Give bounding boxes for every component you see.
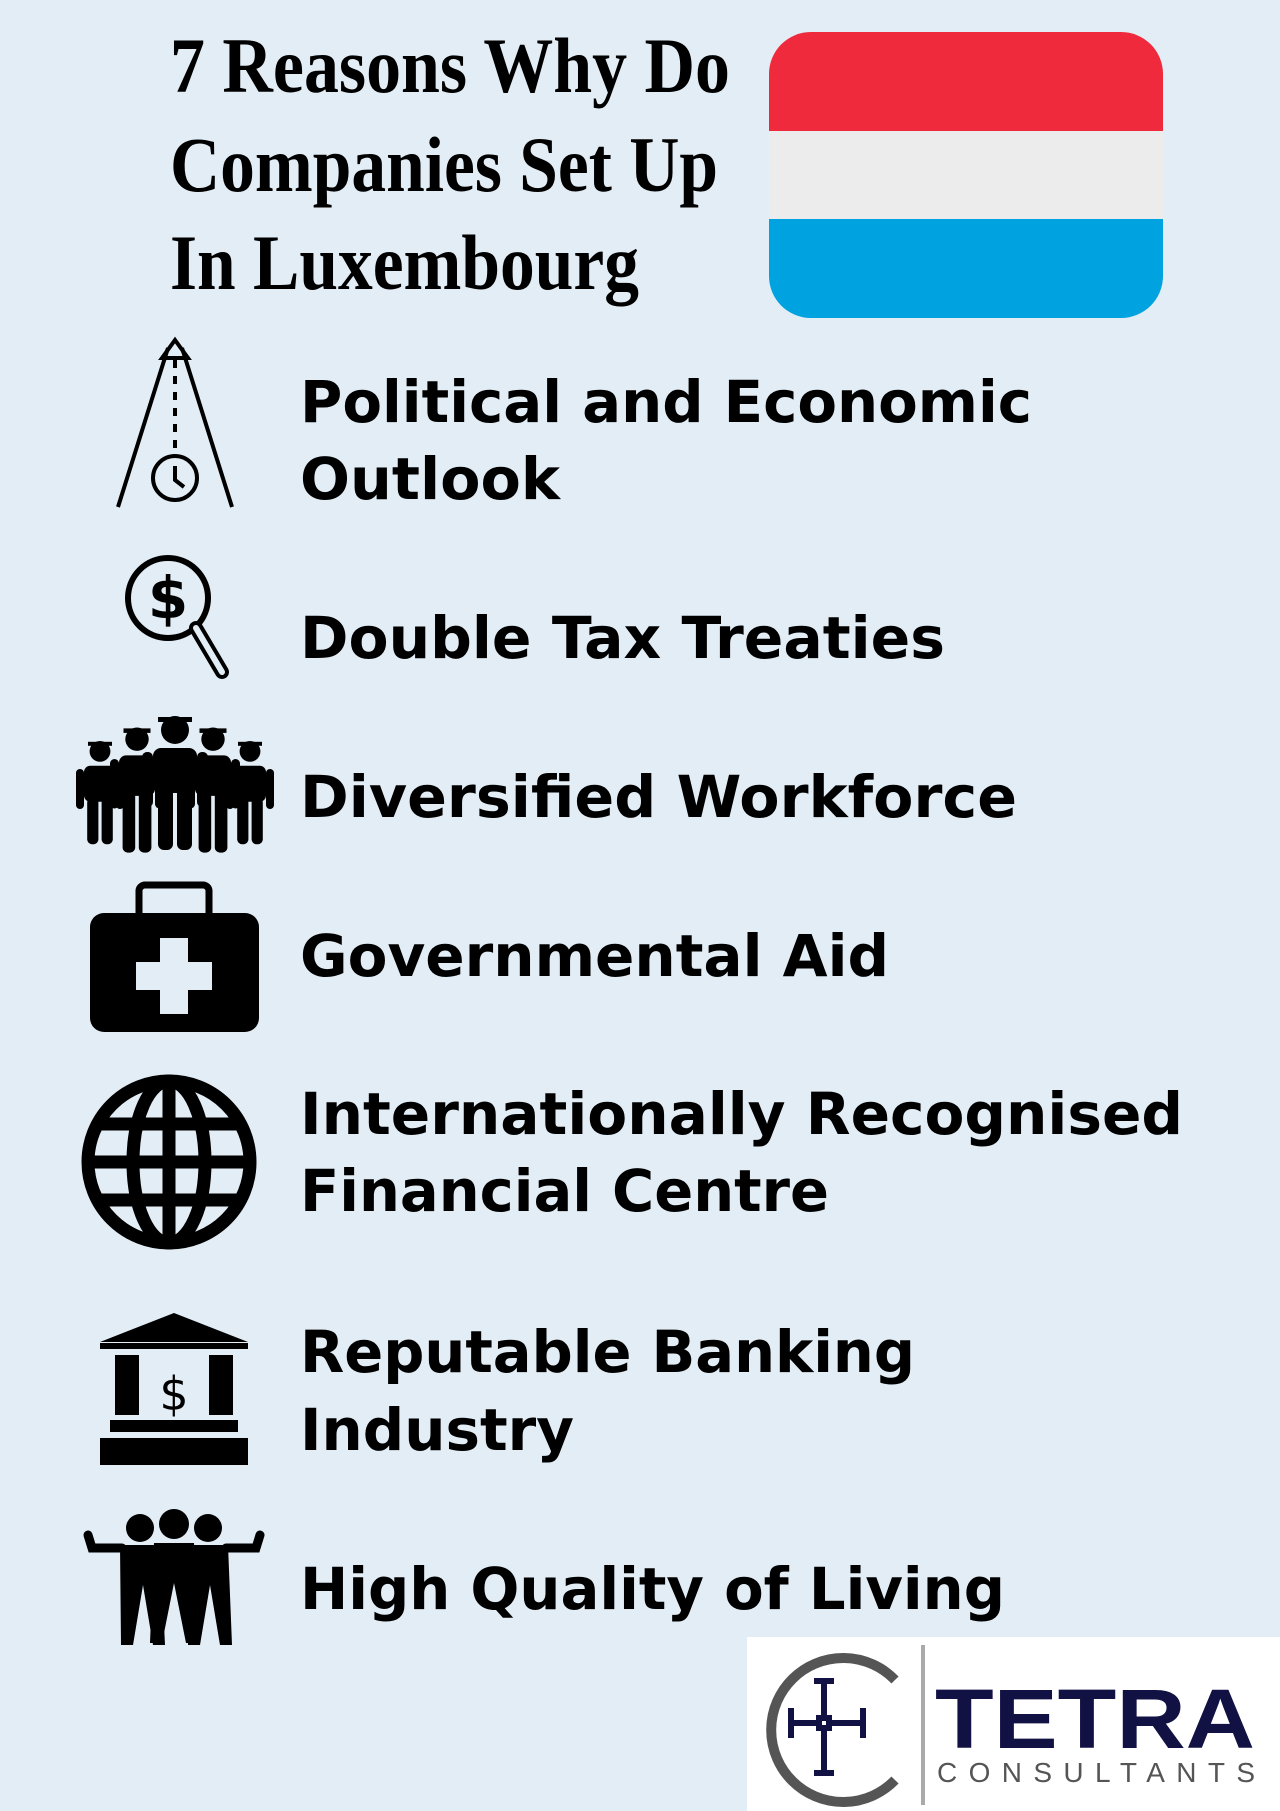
- icon: bank: [100, 1313, 248, 1465]
- icon: people group: [88, 1509, 260, 1645]
- icon: dollar magnifier: $: [148, 564, 188, 632]
- icon: workforce: [76, 716, 274, 853]
- text: aid: Governmental Aid: [300, 922, 889, 990]
- text: financial: Internationally Recognised: [300, 1080, 1183, 1148]
- text: financial: [300, 1080, 1183, 1225]
- icon: dollar magnifier: [128, 558, 222, 672]
- text: financial: Financial Centre: [300, 1157, 829, 1225]
- text: political: [300, 368, 1032, 513]
- icon: bank: $: [159, 1367, 189, 1421]
- logo: tetra consultants: CONSULTANTS: [937, 1757, 1255, 1788]
- text: political: Political and Economic: [300, 368, 1032, 436]
- icon: globe: [88, 1081, 250, 1243]
- title: In Luxembourg: [170, 219, 639, 306]
- title: [170, 22, 730, 306]
- logo: tetra consultants: [747, 1637, 1280, 1811]
- text: living: High Quality of Living: [300, 1555, 1005, 1623]
- icon: road outlook: [118, 340, 232, 507]
- flag: Luxembourg: [769, 32, 1163, 318]
- text: double tax: Double Tax Treaties: [300, 604, 945, 672]
- logo: tetra consultants: TETRA: [935, 1672, 1255, 1766]
- icon: aid kit: [90, 885, 259, 1032]
- text: banking: Industry: [300, 1396, 574, 1464]
- text: workforce: Diversified Workforce: [300, 763, 1017, 831]
- text: banking: Reputable Banking: [300, 1318, 915, 1386]
- text: political: Outlook: [300, 445, 561, 513]
- text: banking: [300, 1318, 915, 1464]
- title: 7 Reasons Why Do: [170, 22, 730, 109]
- title: Companies Set Up: [170, 121, 718, 208]
